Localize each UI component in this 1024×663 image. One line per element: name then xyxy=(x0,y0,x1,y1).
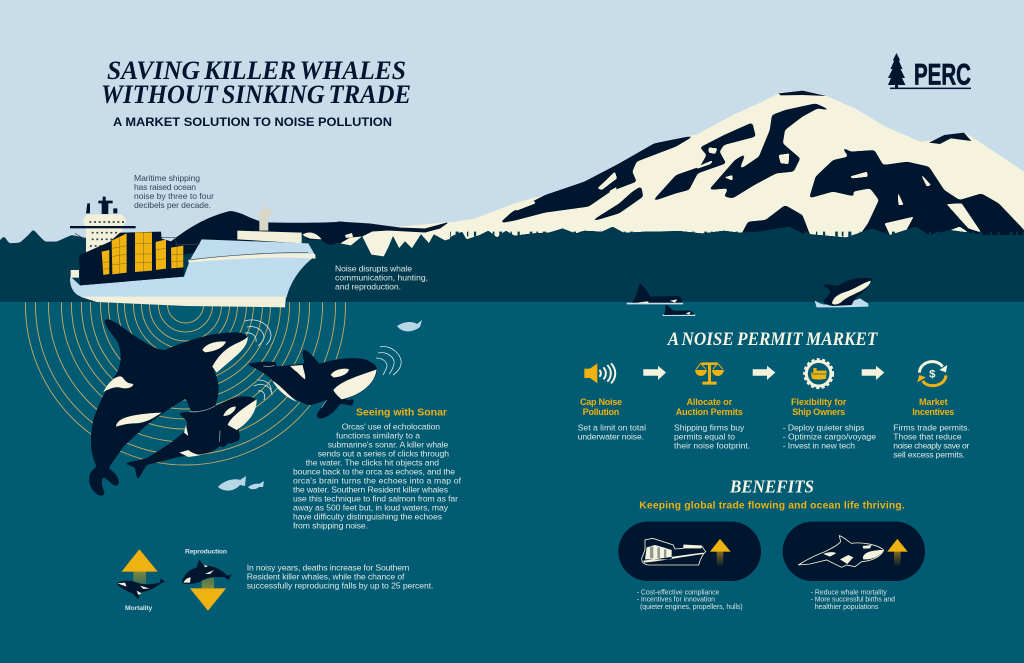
seeing with sonar text: orca's brain turns the echoes into a map of xyxy=(293,475,462,485)
seeing with sonar text: Seeing with Sonar xyxy=(356,407,447,419)
step 2: allocate or auction permits xyxy=(674,397,750,451)
sonar rings xyxy=(25,302,346,466)
sky background xyxy=(0,0,1024,303)
icon: balance scale xyxy=(695,362,724,385)
seeing with sonar text: have difficulty distinguishing the echoes xyxy=(293,511,442,521)
sea xyxy=(0,302,1024,663)
orca benefit bullets: healthier populations xyxy=(815,604,879,611)
icon: gear with ship xyxy=(805,360,833,388)
step 3: flexibility for ship owners: Ship Owners xyxy=(792,407,845,417)
step 2: allocate or auction permits: Auction Permits xyxy=(676,407,743,417)
icon: dollar cycle xyxy=(917,362,947,386)
surfacing orca xyxy=(627,283,683,304)
reproduction label: Reproduction xyxy=(185,548,227,555)
shipping noise note xyxy=(134,173,214,210)
noise disruption note xyxy=(335,264,428,292)
title: SAVING KILLER WHALES xyxy=(107,55,406,85)
step 3: flexibility for ship owners: Flexibility for xyxy=(791,397,847,407)
step 4: market incentives: sell excess permits. xyxy=(893,450,965,460)
PERC logo xyxy=(888,53,971,92)
seeing with sonar text xyxy=(293,407,462,530)
step 1: cap noise pollution xyxy=(578,397,646,442)
noise disruption note: and reproduction. xyxy=(335,282,401,292)
step 4: market incentives: noise cheaply save or xyxy=(893,441,969,451)
step 3: flexibility for ship owners: - Deploy quieter ships xyxy=(783,423,864,433)
seeing with sonar text: sends out a series of clicks through xyxy=(318,448,449,458)
shipping noise note: noise by three to four xyxy=(134,191,214,201)
step 3: flexibility for ship owners: - Optimize cargo/voyage xyxy=(783,432,876,442)
icon: dollar cycle: $ xyxy=(929,368,936,380)
step 2: allocate or auction permits: Allocate or xyxy=(686,397,733,407)
seeing with sonar text: Orcas' use of echolocation xyxy=(342,421,440,431)
panel: ship benefit xyxy=(618,522,761,581)
seeing with sonar text: bounce back to the orca as echoes, and the xyxy=(293,466,455,476)
shipping noise note: Maritime shipping xyxy=(134,173,200,183)
step 3: flexibility for ship owners: - Invest in new tech xyxy=(783,441,855,451)
mountain xyxy=(336,91,1024,313)
title: WITHOUT SINKING TRADE xyxy=(101,79,411,109)
icon: speaker xyxy=(584,363,615,383)
permit market heading: A NOISE PERMIT MARKET xyxy=(667,329,879,350)
orca benefit bullets xyxy=(811,589,895,611)
step 2: allocate or auction permits: permits equal to xyxy=(674,432,735,442)
benefits heading: BENEFITS xyxy=(729,477,814,497)
calf orca xyxy=(123,396,257,481)
step 2: allocate or auction permits: their noise footprint. xyxy=(674,441,750,451)
seeing with sonar text: functions similarly to a xyxy=(336,430,420,440)
ship benefit bullets xyxy=(637,589,743,611)
arrow one xyxy=(643,366,666,380)
noise disruption note: communication, hunting, xyxy=(335,273,428,283)
sonar arcs xyxy=(245,320,401,400)
arrow three xyxy=(862,366,884,380)
title xyxy=(101,55,411,109)
ship benefit bullets: - Cost-effective compliance xyxy=(637,589,720,596)
shipping noise note: has raised ocean xyxy=(134,182,196,192)
seeing with sonar text: the water. Southern Resident killer whales xyxy=(293,484,448,494)
mortality up arrow with orca xyxy=(117,549,165,599)
step 1: cap noise pollution: underwater noise. xyxy=(578,432,644,442)
mortality label: Mortality xyxy=(125,605,153,612)
step 4: market incentives: Incentives xyxy=(912,407,954,417)
snowy foothill between shore and mountain xyxy=(336,222,460,302)
orca benefit bullets: - Reduce whale mortality xyxy=(811,589,887,596)
PERC logo: PERC xyxy=(914,58,971,92)
seeing with sonar text: away as 500 feet but, in loud waters, may xyxy=(293,502,449,512)
panel: orca benefit xyxy=(783,522,925,581)
salmon fish xyxy=(218,320,422,491)
orca benefit bullets: - More successful births and xyxy=(811,597,895,604)
seeing with sonar text: submarine's sonar. A killer whale xyxy=(328,439,449,449)
population impact text: In noisy years, deaths increase for Southern xyxy=(247,563,410,573)
seeing with sonar text: the water. The clicks hit objects and xyxy=(306,457,439,467)
population impact text xyxy=(247,563,433,590)
population impact text: Resident killer whales, while the chance of xyxy=(247,572,405,582)
step 1: cap noise pollution: Set a limit on total xyxy=(578,423,646,433)
seeing with sonar text: from shipping noise. xyxy=(293,520,368,530)
seeing with sonar text: use this technique to find salmon from as far xyxy=(293,493,458,503)
step 4: market incentives xyxy=(893,397,970,460)
breaching orca xyxy=(815,278,872,307)
forested shoreline and dark hill xyxy=(0,211,370,307)
step 1: cap noise pollution: Pollution xyxy=(583,407,619,417)
noise disruption note: Noise disrupts whale xyxy=(335,264,412,274)
large orca xyxy=(89,319,248,496)
population impact text: successfully reproducing falls by up to 25 percent. xyxy=(247,580,433,590)
reproduction down arrow with orca xyxy=(182,559,232,611)
benefits tagline: Keeping global trade flowing and ocean life thriving. xyxy=(639,500,905,511)
step 1: cap noise pollution: Cap Noise xyxy=(580,397,622,407)
step 4: market incentives: Firms trade permits. xyxy=(893,423,970,433)
second surfacing orca xyxy=(663,304,695,316)
right orca xyxy=(246,349,377,419)
shipping noise note: decibels per decade. xyxy=(134,200,211,210)
step 2: allocate or auction permits: Shipping firms buy xyxy=(674,423,745,433)
arrow two xyxy=(753,366,775,380)
ship benefit bullets: - Incentives for innovation xyxy=(637,597,715,604)
subtitle: A MARKET SOLUTION TO NOISE POLLUTION xyxy=(113,115,392,129)
step 4: market incentives: Market xyxy=(919,397,948,407)
cargo ship xyxy=(70,197,316,307)
step 4: market incentives: Those that reduce xyxy=(893,432,962,442)
ship benefit bullets: (quieter engines, propellers, hulls) xyxy=(640,604,743,611)
step 3: flexibility for ship owners xyxy=(783,397,876,451)
